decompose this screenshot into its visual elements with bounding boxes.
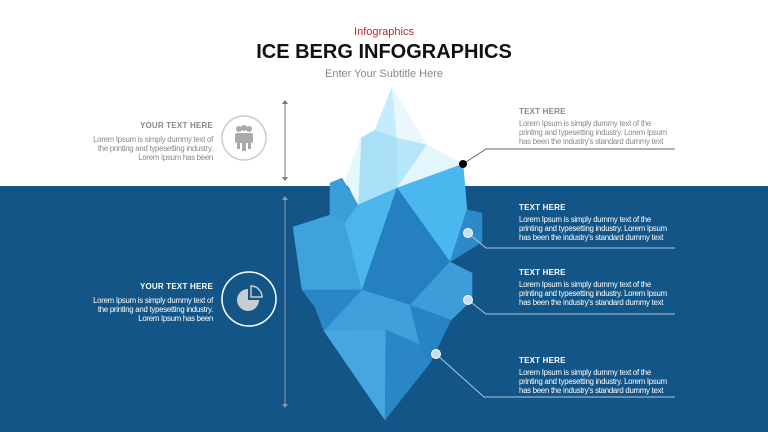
text: left top [93,121,214,162]
text: right 2: Lorem Ipsum is simply dummy text of the [519,215,651,224]
connector: 3 [464,296,675,314]
text: right 3: Lorem Ipsum is simply dummy text of the [519,280,651,289]
text: right 1: printing and typesetting industry. Lorem Ipsum [519,128,667,137]
text: right 4: printing and typesetting industry. Lorem Ipsum [519,377,667,386]
arrow: below water [282,196,288,408]
subtitle: Enter Your Subtitle Here [325,68,443,80]
title: ICE BERG INFOGRAPHICS [256,41,512,63]
text: left bottom: Lorem Ipsum has been [138,314,213,323]
iceberg [293,87,482,420]
text: right 3 [519,268,667,307]
text: right 1: has been the industry's standard dummy text [519,137,663,146]
text: right 2 [519,203,667,242]
text: right 3: has been the industry's standard dummy text [519,298,663,307]
text: right 2: has been the industry's standard dummy text [519,233,663,242]
text: right 3: printing and typesetting industry. Lorem Ipsum [519,289,667,298]
text: left bottom: Lorem Ipsum is simply dummy text of [93,296,213,305]
text: left top: the printing and typesetting industry. [98,144,213,153]
text: right 1 [519,107,667,146]
text: left top: Lorem Ipsum is simply dummy text of [93,135,213,144]
text: left top: Lorem Ipsum has been [138,153,213,162]
water background [0,186,768,432]
arrow: above water [282,100,288,181]
text: right 2: printing and typesetting industry. Lorem Ipsum [519,224,667,233]
text: right 2: TEXT HERE [519,203,566,212]
text: left top: YOUR TEXT HERE [140,121,213,130]
text: right 4: Lorem Ipsum is simply dummy text of the [519,368,651,377]
icon: pie circle [222,272,276,326]
text: right 4 [519,356,667,395]
text: right 4: has been the industry's standard dummy text [519,386,663,395]
text: right 4: TEXT HERE [519,356,566,365]
text: right 1: TEXT HERE [519,107,566,116]
text: right 3: TEXT HERE [519,268,566,277]
text: left bottom [93,282,214,323]
text: left bottom: the printing and typesetting industry. [98,305,213,314]
text: left bottom: YOUR TEXT HERE [140,282,213,291]
connector: 4 [432,350,675,397]
connector: top [459,149,675,168]
icon: people circle [222,116,266,160]
connector: 2 [464,228,675,248]
header label: Infographics [354,26,414,38]
text: right 1: Lorem Ipsum is simply dummy text of the [519,119,651,128]
